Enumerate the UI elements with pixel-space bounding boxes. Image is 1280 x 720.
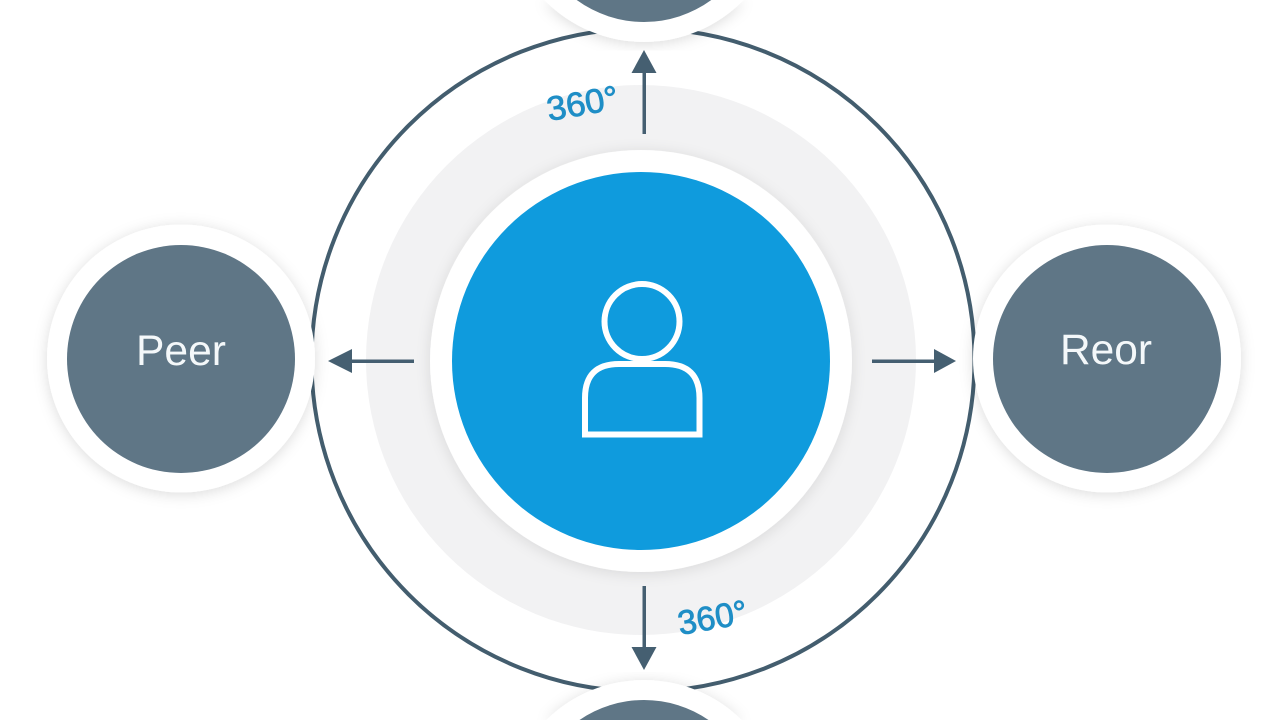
icon: person xyxy=(585,284,700,434)
label: Peer: Peer xyxy=(136,327,226,375)
label: 360 degrees top: 360° xyxy=(544,79,621,129)
label: 360 degrees bottom: 360° xyxy=(675,593,750,643)
node: Peer xyxy=(47,224,315,492)
centre blue disc xyxy=(452,172,830,550)
arrow: right xyxy=(872,349,956,373)
label: Reor: Reor xyxy=(1060,326,1152,374)
node: bottom xyxy=(546,680,742,720)
node: top xyxy=(544,0,744,42)
arrow: down xyxy=(632,586,656,670)
centre white disc xyxy=(430,150,852,572)
arrow: left xyxy=(328,349,414,373)
node: Reor xyxy=(973,224,1241,492)
grey inner band xyxy=(366,85,916,635)
arrow: up xyxy=(632,50,656,134)
outer orbit ring xyxy=(312,28,974,692)
